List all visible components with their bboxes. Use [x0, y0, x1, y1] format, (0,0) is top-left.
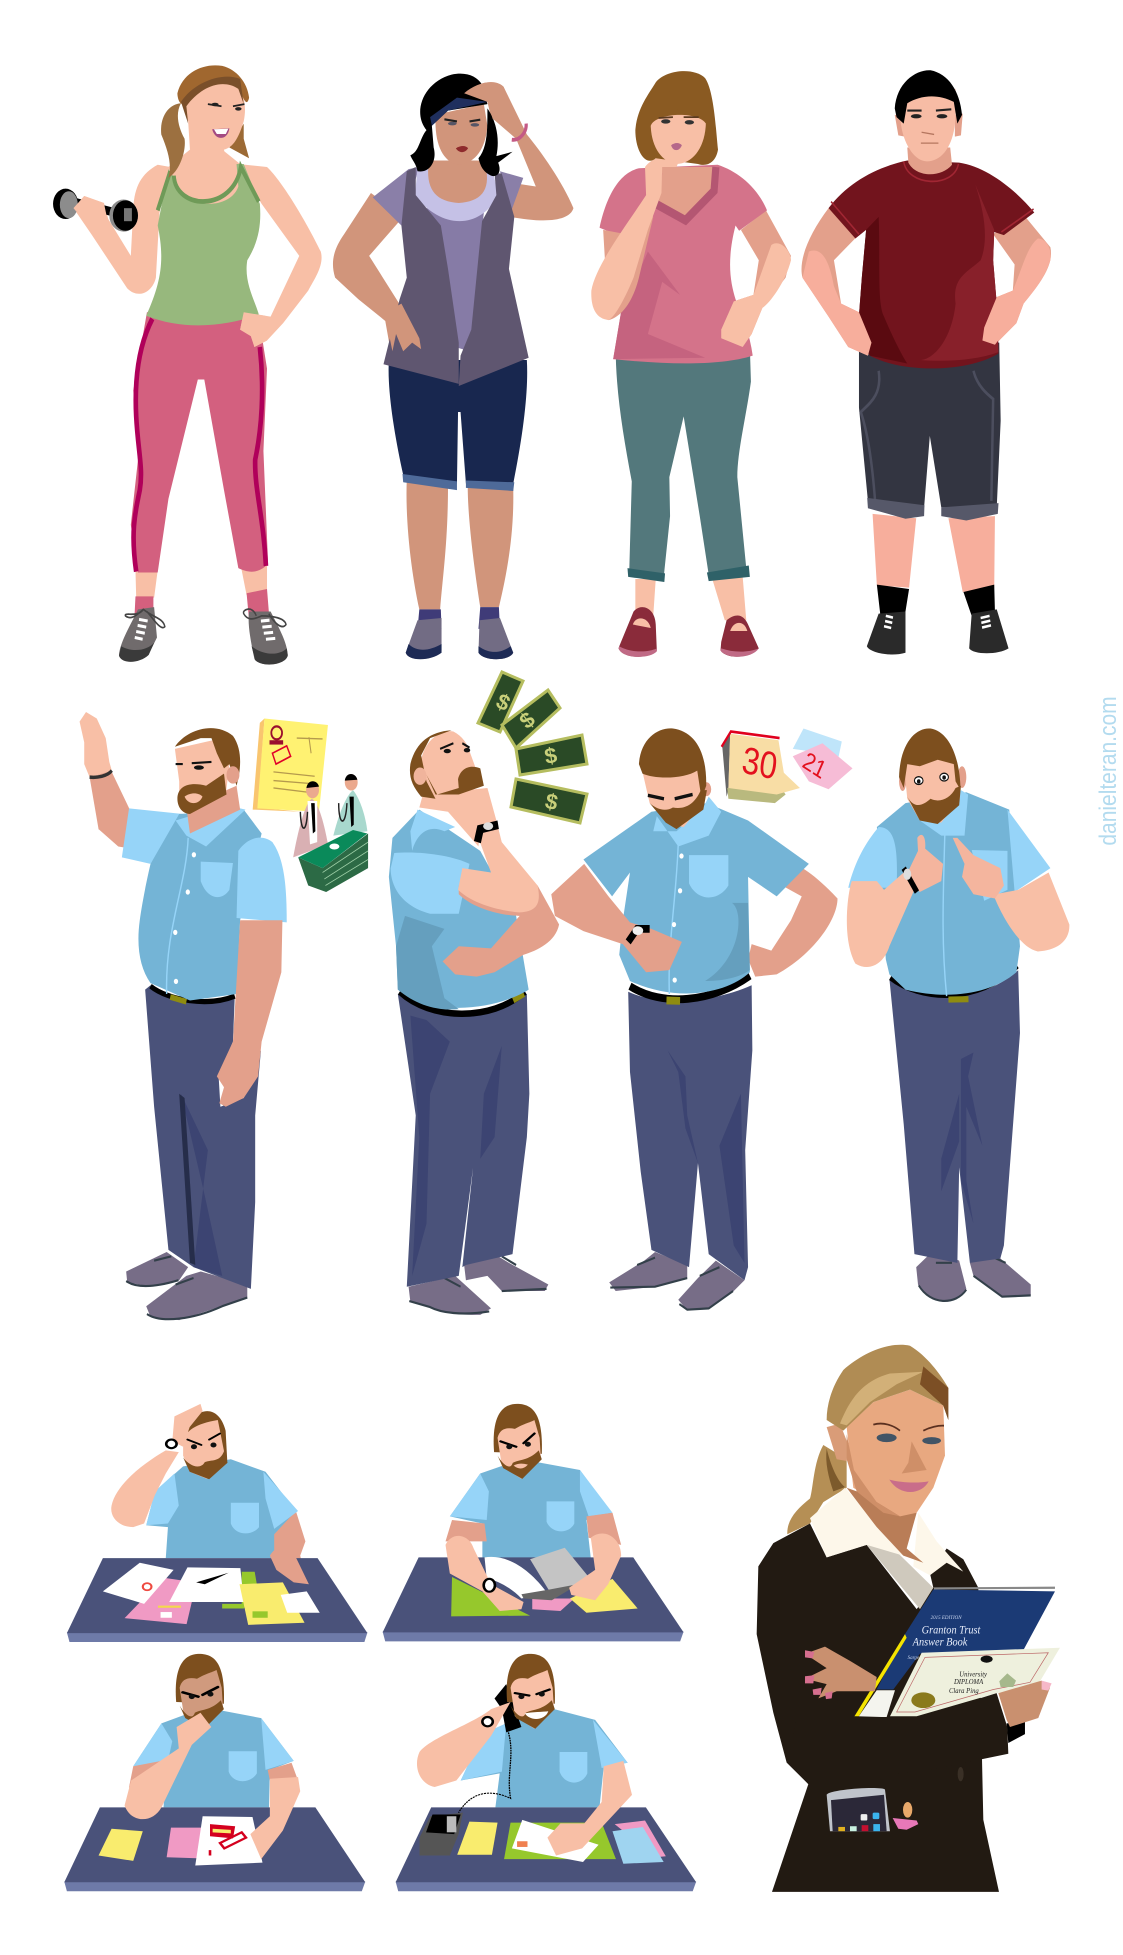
bill 2: $ — [514, 707, 540, 734]
head — [166, 1404, 227, 1479]
belt — [151, 986, 235, 1002]
telephone cord — [459, 1732, 511, 1813]
body — [146, 1459, 298, 1558]
hand on forehead — [464, 82, 516, 119]
pink top — [600, 165, 767, 363]
figure: man checking wristwatch — [551, 728, 838, 1311]
watch — [628, 926, 650, 942]
hand over hip — [385, 304, 421, 351]
pointing hand — [953, 838, 1004, 899]
medical bills, doctors and money stack — [253, 719, 368, 892]
figure: worried dark-haired woman — [333, 74, 573, 659]
figure: man with raised hand — [80, 712, 287, 1320]
bill 4 — [511, 779, 587, 823]
arms — [125, 1713, 300, 1859]
bill 3: $ — [542, 742, 559, 769]
neck and head — [895, 89, 963, 174]
shirt placket — [167, 838, 188, 994]
desk — [396, 1807, 696, 1891]
socks and trainers — [867, 585, 1009, 654]
lower legs and socks — [134, 566, 270, 620]
bill 4: $ — [543, 788, 560, 815]
diploma: DIPLOMA — [953, 1679, 984, 1686]
blue shirt — [138, 810, 262, 1000]
sleeve — [391, 852, 470, 914]
shoes — [119, 607, 288, 665]
body — [133, 1707, 294, 1807]
flying money bills — [478, 672, 587, 823]
desk — [67, 1558, 367, 1642]
face details — [659, 117, 699, 150]
body — [461, 1707, 628, 1807]
arms — [847, 873, 1069, 967]
holding hand — [998, 1681, 1052, 1727]
trousers — [145, 985, 261, 1289]
figure: fit woman with dumbbell — [53, 65, 573, 665]
grey vest — [383, 167, 529, 386]
fringe — [650, 87, 703, 119]
pocket — [972, 850, 1007, 901]
chest and neckline trim — [648, 167, 718, 220]
desk calendar: 30 — [739, 739, 780, 788]
papers — [457, 1820, 666, 1864]
upper forearm — [458, 820, 539, 912]
belt — [890, 966, 1017, 1000]
neck — [419, 788, 496, 846]
tablet in pocket — [827, 1788, 890, 1831]
diploma: Clara Ping — [949, 1688, 979, 1695]
figure: businesswoman with books — [757, 1345, 1060, 1892]
yellow medical form — [253, 719, 328, 812]
left arm — [333, 193, 421, 351]
figure: thoughtful woman in pink top — [591, 71, 791, 657]
shirt shadow — [705, 903, 750, 981]
diploma: University — [959, 1671, 988, 1678]
shoes — [126, 1252, 247, 1320]
hanging arm — [217, 920, 282, 1107]
desk scene: smiling man on telephone — [396, 1654, 696, 1891]
figure: man pointing at himself — [847, 728, 1069, 1301]
book pages and yellow edge — [854, 1634, 907, 1717]
hand on desk — [270, 1546, 309, 1584]
buttons — [173, 852, 196, 984]
neck and face — [183, 82, 245, 163]
shoes — [916, 1248, 1031, 1301]
shirt placket — [943, 833, 947, 996]
bill 3 — [516, 735, 587, 775]
shirt — [877, 792, 1020, 995]
collar — [410, 810, 455, 851]
shirt shadow — [396, 916, 459, 1010]
lower arm — [443, 886, 559, 977]
shirt placket — [669, 842, 678, 994]
chest — [423, 160, 495, 208]
legs — [873, 514, 995, 592]
watch — [477, 822, 498, 842]
lips — [889, 1480, 929, 1492]
face — [651, 115, 706, 164]
red shoes — [619, 607, 759, 657]
desk — [64, 1807, 365, 1891]
desk papers — [103, 1563, 320, 1625]
collar — [653, 797, 721, 846]
arms — [446, 1513, 621, 1611]
arms — [802, 208, 1051, 356]
crossed hand — [805, 1647, 877, 1699]
belt — [630, 976, 750, 1001]
raised arm — [466, 82, 573, 220]
green tank top — [146, 164, 267, 347]
ponytail — [161, 103, 249, 178]
leggings — [131, 312, 268, 572]
legs — [407, 479, 513, 609]
collar — [907, 790, 968, 836]
teal trousers — [616, 347, 751, 582]
desk — [383, 1557, 684, 1641]
blue book — [877, 1588, 1055, 1689]
raised hand — [80, 712, 112, 777]
raised arm — [90, 771, 131, 849]
watch — [903, 868, 917, 892]
bill 1: $ — [492, 688, 514, 716]
face — [847, 1390, 945, 1516]
socks — [418, 607, 500, 629]
head — [176, 1654, 224, 1729]
figure: man in red t-shirt — [802, 70, 1051, 654]
pocket — [201, 862, 233, 897]
ponytail — [787, 1445, 847, 1534]
telephone base — [419, 1813, 463, 1856]
trousers — [628, 985, 752, 1280]
arm on hip — [748, 862, 838, 977]
trousers — [398, 994, 529, 1287]
sleeves — [373, 167, 523, 226]
forearm on hip highlight — [721, 243, 791, 347]
chest — [168, 150, 242, 208]
blue book: Sarge — [908, 1655, 920, 1661]
pacifier — [893, 1802, 918, 1830]
pocket — [689, 855, 728, 897]
arms — [417, 1702, 632, 1856]
black hair — [410, 74, 513, 176]
desk scene: frowning man holding chin — [64, 1654, 365, 1891]
bill 2 — [502, 690, 560, 748]
telephone handset — [495, 1684, 521, 1732]
eyes and brows — [873, 1424, 944, 1444]
body — [450, 1459, 612, 1558]
belt — [400, 992, 525, 1014]
face details — [444, 119, 480, 152]
back sleeve edge — [1007, 1722, 1025, 1743]
arm with dumbbell — [73, 165, 170, 294]
shoes — [609, 1252, 744, 1311]
diploma — [890, 1648, 1060, 1716]
blue book: Granton Trust — [922, 1624, 981, 1637]
shirt — [389, 810, 529, 1008]
doctor left — [293, 781, 328, 857]
bracelet — [512, 124, 526, 140]
sleeves — [848, 810, 1050, 892]
desk scene: man reading a book — [383, 1404, 684, 1641]
money stack — [298, 830, 368, 892]
hand on dumbbell — [73, 196, 107, 230]
red t-shirt — [829, 160, 1034, 368]
shoes — [409, 1252, 548, 1315]
right arm — [270, 1511, 307, 1584]
pink page 21: 21 — [799, 746, 830, 784]
hands over shirt — [838, 291, 1020, 356]
lower legs — [635, 577, 746, 620]
hair — [827, 1345, 948, 1431]
face details — [208, 103, 244, 138]
dark shorts — [859, 343, 1001, 520]
shoes — [406, 618, 513, 659]
raised arm — [591, 156, 680, 320]
watermark credit: danielteran.com — [1095, 696, 1121, 846]
jacket sleeve — [788, 1693, 1008, 1784]
hair — [635, 71, 718, 165]
calendar with falling pages — [722, 729, 853, 803]
face shading — [847, 1434, 927, 1516]
sleeve — [237, 838, 287, 922]
black hair — [895, 70, 962, 124]
forearm and fist — [551, 864, 682, 972]
doctor right — [333, 774, 367, 836]
navy shorts — [389, 360, 527, 491]
face details — [907, 109, 951, 143]
papers — [451, 1577, 530, 1616]
back sleeve — [122, 808, 183, 864]
ear — [827, 1424, 848, 1461]
head — [639, 728, 711, 829]
thumbs up hand — [905, 835, 943, 892]
desk scene: confused man with papers — [67, 1404, 367, 1642]
blue book: Answer Book — [912, 1636, 968, 1649]
collar — [176, 807, 246, 846]
hair — [177, 65, 249, 124]
purple top — [426, 208, 484, 351]
papers — [99, 1816, 262, 1866]
arm on hip — [721, 210, 791, 347]
trousers — [889, 970, 1020, 1263]
dark jacket — [757, 1523, 999, 1892]
head — [175, 728, 240, 833]
arm on hip — [238, 164, 322, 347]
bill 1 — [478, 672, 523, 732]
face — [435, 104, 487, 165]
head — [410, 730, 484, 799]
neck — [847, 1488, 923, 1563]
head — [899, 728, 966, 824]
jacket button — [958, 1767, 964, 1781]
blue loose page — [793, 729, 842, 762]
figure: thinking man looking up — [389, 730, 559, 1315]
dumbbell — [53, 189, 138, 232]
buttons — [672, 853, 684, 983]
arm to head — [111, 1450, 179, 1527]
hand on hip over top — [721, 295, 761, 347]
shirt — [583, 803, 809, 993]
head — [494, 1404, 542, 1479]
open book — [485, 1548, 592, 1600]
lavender collar — [415, 163, 498, 221]
shirt and collar — [810, 1488, 963, 1609]
head — [507, 1654, 555, 1729]
blue book: 2015 EDITION — [931, 1615, 962, 1621]
